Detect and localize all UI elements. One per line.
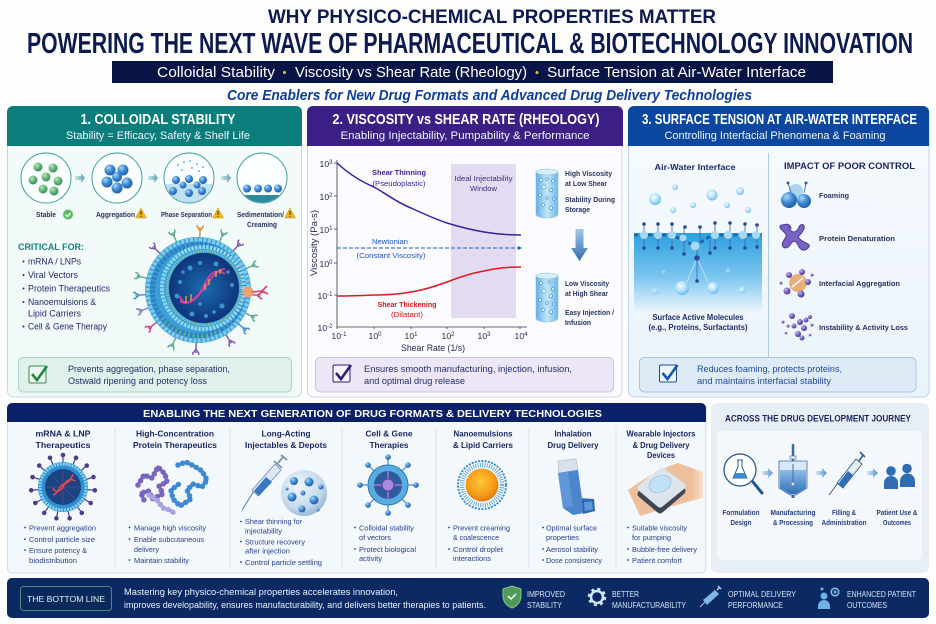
bottom line badge: THE BOTTOM LINE bbox=[27, 594, 105, 604]
stage labels: Stable bbox=[36, 210, 56, 219]
bullets: injectability bbox=[245, 526, 282, 536]
axes bbox=[334, 160, 527, 329]
tagline: Core Enablers for New Drug Formats and Advanced Drug Delivery Technologies bbox=[227, 87, 752, 104]
x axis tick labels: 10 bbox=[405, 331, 414, 341]
callout: rheology benefit bbox=[316, 358, 614, 392]
y axis tick labels: 10 bbox=[320, 192, 329, 202]
format title: Protein Therapeutics bbox=[133, 440, 217, 450]
journey labels: Manufacturing bbox=[770, 508, 816, 517]
label: newtonian: (Constant Viscosity) bbox=[356, 251, 426, 260]
format: mRNA and LNP therapeutics bbox=[24, 428, 97, 565]
y axis tick labels: 10 bbox=[318, 291, 327, 301]
format title: Wearable Injectors bbox=[626, 428, 696, 438]
y axis tick labels: 10 bbox=[320, 225, 329, 235]
y axis tick labels: 10 bbox=[320, 259, 329, 269]
curve: shear thickening bbox=[337, 267, 521, 296]
icon: protein denaturation bbox=[780, 224, 809, 250]
bullets: of vectors bbox=[359, 533, 391, 542]
format: inhalation drug delivery bbox=[542, 428, 602, 565]
x axis tick labels: 10 bbox=[369, 331, 378, 341]
x axis tick labels: 4 bbox=[524, 332, 528, 338]
icon: interfacial aggregation bbox=[780, 269, 814, 298]
stage: stable bbox=[21, 153, 71, 203]
bullets: Dose consistency bbox=[546, 556, 602, 565]
text: foaming: Foaming bbox=[819, 191, 849, 200]
panel subheading: Controlling Interfacial Phenomena & Foaming bbox=[664, 130, 886, 142]
format: high-concentration protein therapeutics bbox=[129, 428, 217, 565]
stage: aggregation bbox=[92, 153, 142, 203]
label: shear thickening bbox=[378, 300, 437, 319]
panel subheading: Enabling Injectability, Pumpability & Performance bbox=[340, 130, 590, 142]
icon: foaming bbox=[781, 182, 811, 208]
stage labels: Phase Separation bbox=[161, 210, 212, 219]
stage: phase separation bbox=[164, 153, 214, 204]
format title bbox=[453, 428, 513, 450]
format: cell and gene therapies bbox=[354, 428, 419, 563]
journey labels: Formulation bbox=[722, 508, 760, 517]
bullets: after injection bbox=[245, 546, 290, 556]
y axis tick labels: -2 bbox=[327, 324, 333, 330]
format title: Inhalation bbox=[554, 428, 592, 438]
bullets: Shear thinning for bbox=[245, 517, 302, 526]
benefit: enhanced patient outcomes: OUTCOMES bbox=[847, 601, 887, 610]
arrow bbox=[867, 468, 878, 478]
critical for list: Protein Therapeutics bbox=[28, 284, 111, 294]
label: newtonian bbox=[356, 237, 426, 260]
panel: viscosity vs shear rate bbox=[307, 106, 623, 397]
bullets: for pumping bbox=[632, 533, 671, 542]
curve: shear thinning bbox=[337, 163, 521, 235]
text: low viscosity at high shear: Infusion bbox=[565, 318, 591, 327]
y axis tick labels: 0 bbox=[329, 260, 333, 266]
format: wearable injectors bbox=[626, 428, 703, 565]
bullets: activity bbox=[359, 554, 382, 563]
journey labels: Filling & bbox=[832, 508, 857, 517]
bullets: Control particle size bbox=[29, 535, 95, 544]
bullets: properties bbox=[546, 533, 579, 542]
format title bbox=[36, 428, 91, 450]
critical for list bbox=[18, 242, 111, 332]
benefit: better manufacturability: MANUFACTURABILITY bbox=[612, 601, 687, 610]
bullets: Colloidal stability bbox=[359, 524, 414, 532]
format title bbox=[548, 428, 599, 450]
text: low viscosity at high shear: at High Shear bbox=[565, 289, 608, 298]
format title: Injectables & Depots bbox=[245, 440, 327, 450]
critical for list: mRNA / LNPs bbox=[28, 256, 82, 266]
callout: interface benefit bbox=[640, 358, 916, 392]
critical for list: Cell & Gene Therapy bbox=[28, 322, 108, 332]
bullets: Structure recovery bbox=[245, 538, 305, 546]
bullets: & coalescence bbox=[453, 533, 499, 542]
x axis tick labels: -1 bbox=[341, 332, 347, 338]
ideal injectability window: Window bbox=[470, 184, 498, 193]
x axis tick labels: 10 bbox=[332, 331, 341, 341]
inner card bbox=[717, 431, 922, 560]
callout: colloidal benefit: Ostwald ripening and potency loss bbox=[68, 375, 207, 386]
y axis tick labels: 10 bbox=[318, 323, 327, 333]
subtitle band: Surface Tension at Air-Water Interface bbox=[547, 64, 806, 81]
illustration: air-water interface bbox=[634, 184, 762, 313]
arrow bbox=[762, 468, 773, 478]
bullets: Ensure potency & bbox=[29, 546, 87, 555]
journey labels: Design bbox=[730, 518, 752, 527]
text: interfacial aggregation: Interfacial Aggregation bbox=[819, 279, 900, 288]
label: shear thickening: Shear Thickening bbox=[378, 300, 437, 309]
text: high viscosity at low shear bbox=[565, 169, 615, 214]
icon: instability and activity loss bbox=[782, 313, 814, 340]
text: high viscosity at low shear: High Viscosity bbox=[565, 169, 613, 178]
stage labels: Creaming bbox=[247, 220, 277, 229]
icon: wearable device bbox=[628, 463, 703, 516]
panel: colloidal stability bbox=[7, 106, 302, 397]
icon: high viscosity vial bbox=[536, 169, 558, 218]
bullets: Suitable viscosity bbox=[632, 524, 687, 532]
icon: syringe and depot bbox=[242, 455, 327, 516]
format title: Devices bbox=[647, 450, 675, 460]
label: shear thinning: Shear Thinning bbox=[372, 168, 426, 177]
y axis title: Viscosity (Pa-s) bbox=[309, 210, 319, 276]
divider bbox=[768, 153, 770, 357]
format title bbox=[626, 428, 696, 460]
callout: rheology benefit: and optimal drug release bbox=[364, 375, 465, 386]
heading: air-water interface: Air-Water Interface bbox=[654, 162, 736, 172]
journey labels: Outcomes bbox=[883, 518, 911, 527]
panel header bbox=[307, 106, 623, 146]
x axis tick labels: 10 bbox=[442, 331, 451, 341]
icon: inhaler bbox=[558, 459, 595, 515]
format title: & Drug Delivery bbox=[632, 440, 690, 450]
journey labels: Patient Use & bbox=[876, 508, 918, 517]
arrow bbox=[221, 173, 231, 183]
text: low viscosity at high shear bbox=[565, 279, 614, 327]
benefit: better manufacturability bbox=[589, 589, 687, 610]
benefit: improved stability: IMPROVED bbox=[527, 590, 565, 599]
title: why physico-chemical properties matter: WHY PHYSICO-CHEMICAL PROPERTIES MATTER bbox=[268, 6, 716, 28]
bullets bbox=[240, 517, 322, 567]
y axis tick labels: 3 bbox=[329, 160, 333, 166]
text: low viscosity at high shear: Easy Injection / bbox=[565, 308, 614, 317]
subtitle band: Colloidal Stability bbox=[157, 64, 276, 81]
format title: Therapeutics bbox=[36, 440, 91, 450]
label: shear thickening: (Dilatant) bbox=[391, 310, 423, 319]
bullets bbox=[354, 524, 416, 563]
section header bbox=[7, 403, 706, 422]
bullets: Protect biological bbox=[359, 545, 416, 554]
format title bbox=[133, 428, 217, 450]
journey labels bbox=[722, 508, 918, 527]
bottom line text: improves developability, ensures manufacturability, and delivers better therapies to patients. bbox=[124, 600, 486, 610]
bullets bbox=[627, 524, 697, 565]
label: surface active molecules: Surface Active Molecules bbox=[652, 313, 744, 322]
bullets: Maintain stability bbox=[134, 556, 189, 565]
benefit: enhanced patient outcomes bbox=[818, 588, 916, 610]
x axis title: Shear Rate (1/s) bbox=[401, 343, 465, 353]
bullets: biodistribution bbox=[29, 556, 77, 565]
benefit: improved stability bbox=[503, 586, 565, 610]
format title bbox=[245, 428, 327, 450]
bullets: Prevent aggregation bbox=[29, 524, 96, 532]
x axis tick labels: 10 bbox=[478, 331, 487, 341]
bullets: Patient comfort bbox=[632, 556, 683, 565]
y axis tick labels: 1 bbox=[329, 226, 333, 232]
panel: surface tension bbox=[628, 106, 929, 397]
bullets bbox=[24, 524, 96, 565]
bullets: Prevent creaming bbox=[453, 524, 510, 532]
icon: patients bbox=[884, 464, 915, 489]
critical for list: Lipid Carriers bbox=[28, 308, 82, 318]
subtitle band bbox=[112, 61, 833, 83]
x axis tick labels: 10 bbox=[515, 331, 524, 341]
y axis tick labels bbox=[318, 159, 333, 333]
panel heading: 1. COLLOIDAL STABILITY bbox=[80, 112, 236, 128]
text: high viscosity at low shear: Storage bbox=[565, 205, 590, 214]
stage labels bbox=[36, 208, 296, 229]
x axis tick labels: 1 bbox=[414, 332, 418, 338]
callout: colloidal benefit: Prevents aggregation, phase separation, bbox=[68, 363, 230, 374]
y axis tick labels: -1 bbox=[327, 292, 333, 298]
icon: LNP bbox=[29, 453, 97, 521]
icon: viral vector bbox=[357, 454, 419, 516]
format title bbox=[366, 428, 413, 450]
benefit: enhanced patient outcomes: ENHANCED PATIENT bbox=[847, 590, 916, 599]
panel: next generation drug formats bbox=[7, 403, 706, 573]
y axis tick labels: 2 bbox=[329, 193, 333, 199]
stage: sedimentation bbox=[237, 153, 287, 205]
panel header bbox=[7, 106, 302, 146]
format title: Nanoemulsions bbox=[454, 428, 513, 438]
icon: manufacturing vessel bbox=[779, 444, 807, 498]
curve: newtonian bbox=[337, 246, 522, 250]
ideal injectability window: Ideal Injectability bbox=[454, 174, 513, 183]
heading: impact of poor control: IMPACT OF POOR CONTROL bbox=[784, 161, 915, 172]
label: newtonian: Newtonian bbox=[372, 237, 408, 246]
benefit: better manufacturability: BETTER bbox=[612, 590, 639, 599]
icon: low viscosity vial bbox=[536, 273, 558, 322]
benefit: optimal delivery performance: PERFORMANCE bbox=[728, 601, 783, 610]
format title: Drug Delivery bbox=[548, 440, 599, 450]
x axis tick labels: 2 bbox=[451, 332, 455, 338]
arrow bbox=[75, 173, 85, 183]
ideal injectability window bbox=[451, 164, 516, 318]
bullets: Optimal surface bbox=[546, 524, 597, 532]
benefit: optimal delivery performance bbox=[700, 586, 797, 610]
bullets: Control particle settling bbox=[245, 558, 322, 567]
label: surface active molecules: (e.g., Proteins, Surfactants) bbox=[648, 323, 748, 332]
critical for list: CRITICAL FOR: bbox=[18, 242, 84, 252]
format title: mRNA & LNP bbox=[36, 428, 91, 438]
panel header bbox=[628, 106, 929, 146]
benefit: improved stability: STABILITY bbox=[527, 601, 563, 610]
format title: Long-Acting bbox=[262, 428, 310, 438]
bullets: Aerosol stability bbox=[546, 545, 598, 554]
section heading: ENABLING THE NEXT GENERATION OF DRUG FORMATS & DELIVERY TECHNOLOGIES bbox=[143, 408, 602, 420]
panel heading: 2. VISCOSITY vs SHEAR RATE (RHEOLOGY) bbox=[332, 112, 600, 128]
x axis tick labels: 3 bbox=[487, 332, 491, 338]
bullets: delivery bbox=[134, 545, 159, 554]
bottom line badge bbox=[20, 586, 112, 610]
text: protein denaturation: Protein Denaturation bbox=[819, 234, 896, 243]
bullets bbox=[129, 524, 206, 565]
text: low viscosity at high shear: Low Viscosity bbox=[565, 279, 610, 288]
arrow bbox=[148, 173, 158, 183]
icon: nanoemulsion droplet bbox=[458, 461, 506, 509]
bullets bbox=[448, 524, 510, 563]
chart: viscosity vs shear rate bbox=[309, 159, 528, 353]
label: shear thinning bbox=[372, 168, 426, 188]
label: surface active molecules bbox=[648, 313, 748, 332]
stage labels: Sedimentation/ bbox=[237, 210, 284, 219]
x axis tick labels bbox=[332, 331, 528, 341]
format title: High-Concentration bbox=[136, 428, 214, 438]
callout: colloidal benefit bbox=[18, 358, 292, 392]
icon: protein cluster bbox=[138, 462, 207, 513]
format title: Cell & Gene bbox=[366, 428, 413, 438]
journey labels: Administration bbox=[822, 518, 867, 527]
bullets: interactions bbox=[453, 554, 491, 563]
benefit: optimal delivery performance: OPTIMAL DELIVERY bbox=[728, 590, 797, 599]
x axis tick labels: 0 bbox=[378, 332, 382, 338]
critical for list: Viral Vectors bbox=[28, 270, 79, 280]
bullets: Bubble-free delivery bbox=[632, 545, 697, 554]
bullets: Manage high viscosity bbox=[134, 524, 206, 532]
subtitle band: Viscosity vs Shear Rate (Rheology) bbox=[295, 64, 527, 81]
text: high viscosity at low shear: Stability During bbox=[565, 195, 615, 204]
icon: lipid nanoparticle bbox=[133, 225, 268, 355]
y axis tick labels: 10 bbox=[320, 159, 329, 169]
bullets: Control droplet bbox=[453, 545, 504, 554]
panel subheading: Stability = Efficacy, Safety & Shelf Life bbox=[66, 130, 250, 142]
callout: interface benefit: and maintains interfacial stability bbox=[697, 375, 831, 386]
format: long-acting injectables and depots bbox=[240, 428, 327, 567]
icon: formulation design bbox=[724, 454, 762, 493]
label: shear thinning: (Pseudoplastic) bbox=[372, 179, 426, 188]
arrow: down bbox=[571, 229, 588, 261]
bottom line text bbox=[124, 587, 486, 610]
text: instability and activity loss: Instability & Activity Loss bbox=[819, 323, 908, 332]
bottom line bar bbox=[7, 578, 929, 618]
format: nanoemulsions and lipid carriers bbox=[448, 428, 513, 563]
text: high viscosity at low shear: at Low Shear bbox=[565, 179, 607, 188]
bullets bbox=[542, 524, 602, 565]
journey labels: & Processing bbox=[773, 518, 813, 527]
format title: & Lipid Carriers bbox=[453, 440, 513, 450]
stage labels: Aggregation bbox=[96, 210, 135, 219]
panel: across the drug development journey bbox=[711, 403, 929, 573]
callout: interface benefit: Reduces foaming, protects proteins, bbox=[697, 363, 842, 374]
format title: Therapies bbox=[370, 440, 409, 450]
icon: filling syringe bbox=[829, 452, 865, 495]
bottom line text: Mastering key physico-chemical properties accelerates innovation, bbox=[124, 587, 398, 597]
callout: rheology benefit: Ensures smooth manufacturing, injection, infusion, bbox=[364, 363, 572, 374]
critical for list: Nanoemulsions & bbox=[28, 297, 96, 307]
bullets: Enable subcutaneous bbox=[134, 535, 204, 544]
arrow bbox=[816, 468, 827, 478]
